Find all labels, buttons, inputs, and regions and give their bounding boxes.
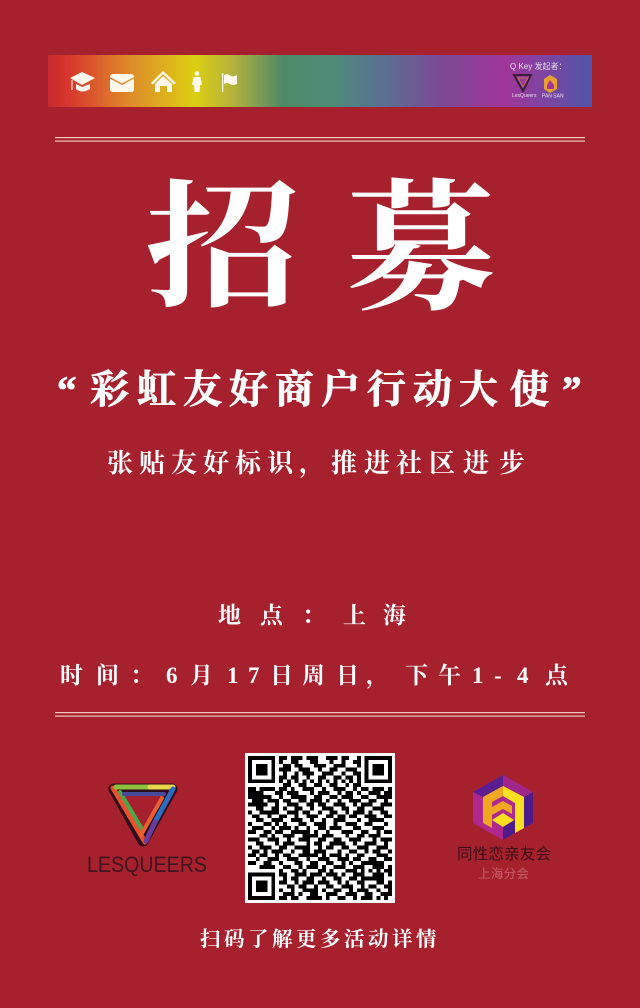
initiators label: Q Key 发起者： [510, 61, 566, 71]
icon: envelope briefcase [110, 74, 134, 92]
logo: LESQUEERS [87, 787, 207, 877]
wordmark: LESQUEERS [87, 852, 207, 877]
branch name: 上海分会 [478, 866, 529, 881]
slogan: 张贴友好标识，推进社区进步 [107, 448, 525, 479]
icon: graduation cap [70, 72, 95, 92]
title: 募 [346, 172, 496, 329]
top double rule [55, 137, 585, 142]
logo: PFLAG Shanghai [457, 775, 551, 881]
qr code [245, 753, 395, 903]
rainbow header bar [48, 55, 592, 107]
icon: flag [222, 73, 237, 92]
icon: small pflag logo [542, 75, 564, 100]
subtitle: rainbow friendly ambassador: “彩虹友好商户行动大使” [57, 369, 582, 412]
location: 地点：上海 [218, 602, 406, 628]
icon: house [151, 71, 176, 92]
title: 招 [145, 173, 300, 325]
icon: person [192, 71, 202, 92]
icon: small lesqueers logo: LesQueers [512, 93, 537, 99]
icon: small pflag logo: PAN SAN [542, 94, 564, 100]
organisation name: 同性恋亲友会 [457, 844, 551, 863]
bottom double rule [55, 712, 585, 717]
time: 时间：6月17日周日，下午1-4点 [60, 662, 570, 689]
icon: isometric hexagon house [473, 775, 533, 840]
scan call to action: 扫码了解更多活动详情 [200, 928, 437, 951]
icon: rainbow penrose triangle [113, 787, 173, 842]
icon: small lesqueers logo [512, 75, 537, 99]
title [145, 172, 496, 329]
